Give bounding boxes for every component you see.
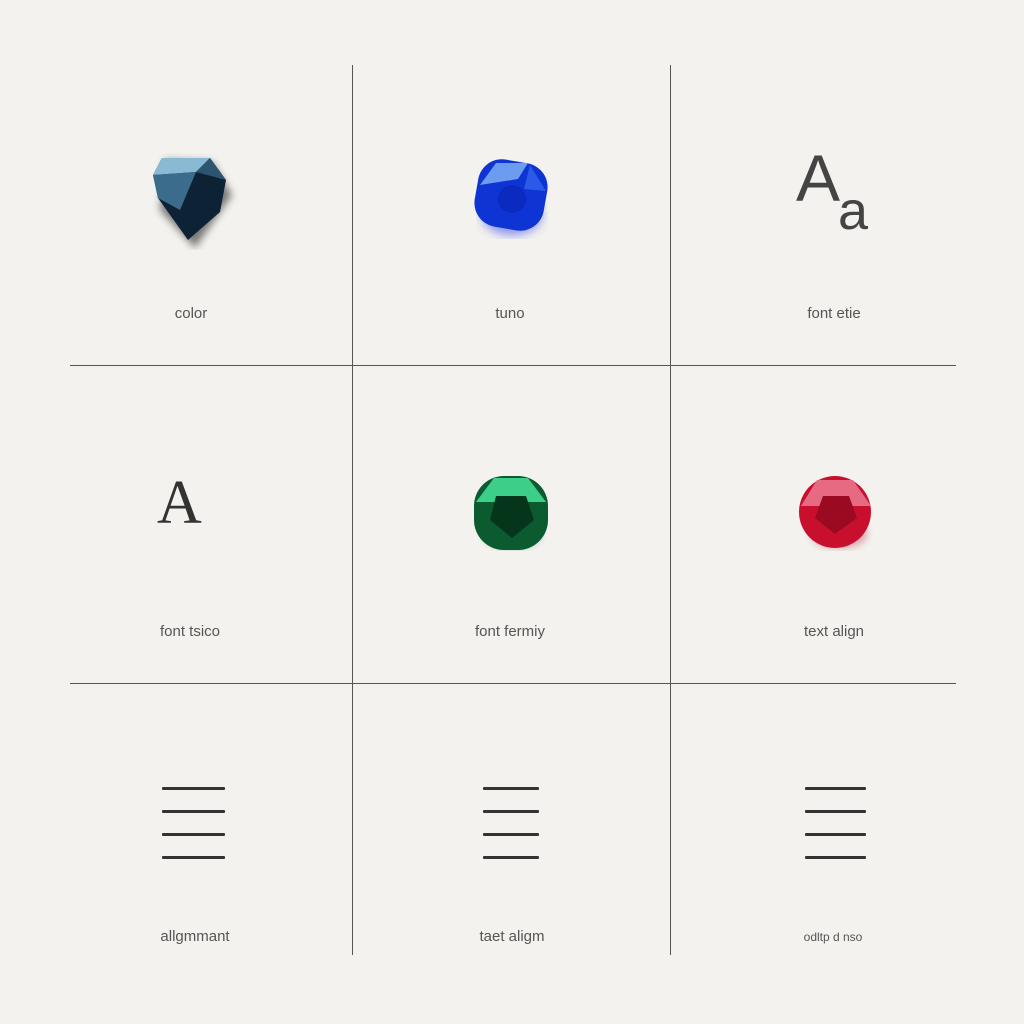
text: font fermiy [475,623,545,640]
text: font etie [807,305,861,322]
icon: red gem [799,476,871,551]
icon: green gem [474,476,548,551]
text: tuno [495,305,525,322]
icon: lines [162,787,225,859]
icon: blue gem [474,159,548,239]
label: color [175,305,207,322]
icon: Aa: a [838,181,868,241]
text: odltp d nso [804,930,862,944]
text: font tsico [160,623,220,640]
icon: Aa: A [796,141,840,215]
icon: Aa [796,141,868,241]
icon: lines [483,787,539,859]
text: allgmmant [160,928,230,945]
text: taet aligm [479,928,545,945]
icon: lines [805,787,866,859]
icon: serif A: A [157,469,202,537]
text: text align [804,623,864,640]
icon: dark gem [153,154,236,250]
